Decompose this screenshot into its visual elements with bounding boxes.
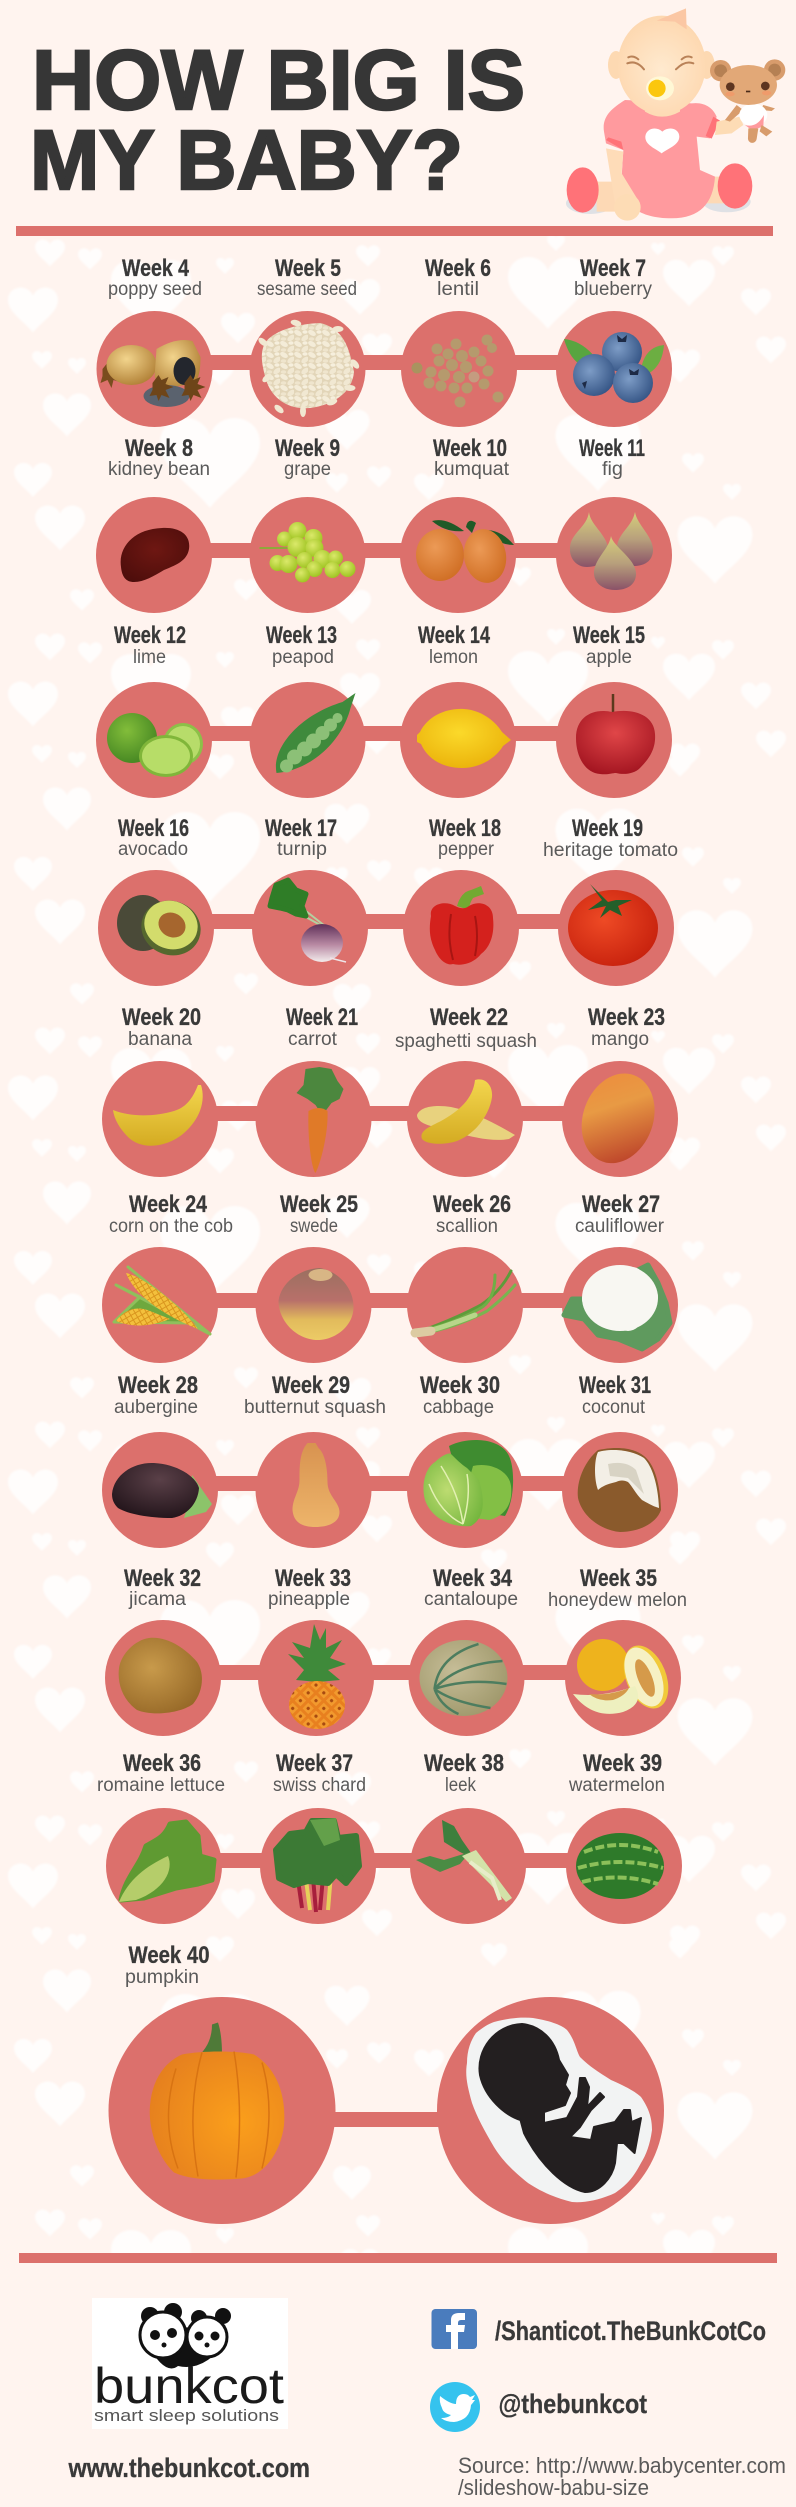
logo: bunkcot: bunkcot <box>94 2358 284 2414</box>
row: weeks 16 to 19 <box>98 815 678 986</box>
week 33: pineapple: pineapple <box>268 1589 350 1610</box>
week 12: lime <box>96 622 212 798</box>
title <box>30 33 525 207</box>
week 22: spaghetti squash <box>395 1004 537 1177</box>
connector <box>156 914 616 929</box>
week 37: swiss chard <box>260 1750 376 1924</box>
week 14: lemon: Week 14 <box>418 622 490 649</box>
connector <box>164 1853 624 1868</box>
week 17: turnip: Week 17 <box>265 815 337 842</box>
week 6: lentil <box>401 255 517 427</box>
week 34: cantaloupe <box>408 1565 524 1736</box>
week 31: coconut: coconut <box>582 1397 646 1418</box>
week 40: pumpkin: Week 40 <box>128 1942 210 1969</box>
icon: aubergine <box>112 1463 212 1518</box>
icon: watermelon <box>576 1833 664 1899</box>
week 13: peapod <box>250 622 366 798</box>
icon: cantaloupe <box>420 1640 508 1716</box>
week 31: coconut: Week 31 <box>579 1372 651 1399</box>
week 15: apple <box>556 622 672 798</box>
week 38: leek <box>410 1750 526 1924</box>
row: week 40 and baby <box>108 1942 664 2224</box>
icon: lentils <box>412 334 504 408</box>
week 29: butternut squash: Week 29 <box>272 1372 350 1399</box>
icon: peapod <box>276 693 356 773</box>
week 19: heritage tomato <box>543 815 678 986</box>
week 6: lentil: Week 6 <box>425 255 491 282</box>
connector <box>154 726 614 741</box>
week 28: aubergine <box>102 1372 218 1548</box>
week 28: aubergine: Week 28 <box>118 1372 198 1399</box>
week 36: romaine lettuce: Week 36 <box>123 1750 201 1777</box>
icon: jicama <box>119 1638 202 1713</box>
week 39: watermelon: Week 39 <box>583 1750 662 1777</box>
icon: grapes <box>260 522 356 582</box>
week 37: swiss chard: swiss chard <box>273 1775 366 1796</box>
week 28: aubergine: aubergine <box>114 1397 198 1418</box>
week 27: cauliflower: Week 27 <box>582 1191 660 1218</box>
title: HOW BIG IS <box>32 33 525 127</box>
icon: lemon <box>417 709 511 768</box>
icon: avocado <box>117 892 208 964</box>
week 14: lemon <box>400 622 516 798</box>
week 35: honeydew melon: Week 35 <box>580 1565 657 1592</box>
week 30: cabbage: Week 30 <box>420 1372 500 1399</box>
week 39: watermelon <box>566 1750 682 1924</box>
top divider <box>16 226 773 236</box>
icon: romaine lettuce <box>119 1822 214 1902</box>
connector <box>154 355 614 370</box>
week 22: spaghetti squash: Week 22 <box>430 1004 508 1031</box>
week 20: banana: Week 20 <box>122 1004 201 1031</box>
week 10: kumquat: Week 10 <box>433 435 507 462</box>
week 22: spaghetti squash: spaghetti squash <box>395 1031 537 1052</box>
week 8: kidney bean: kidney bean <box>108 459 210 480</box>
icon: pandas <box>140 2303 231 2368</box>
week 38: leek: Week 38 <box>424 1750 504 1777</box>
week 24: corn on the cob: Week 24 <box>129 1191 208 1218</box>
week 12: lime: lime <box>133 647 166 668</box>
week 40: pumpkin <box>108 1942 336 2224</box>
week 25: swede: swede <box>290 1216 338 1237</box>
icon: tomato <box>568 884 658 966</box>
row: weeks 20 to 23 <box>102 1004 678 1177</box>
week 23: mango: Week 23 <box>588 1004 665 1031</box>
week 11: fig: fig <box>602 459 623 480</box>
week 21: carrot <box>256 1004 372 1177</box>
week 33: pineapple <box>258 1565 374 1736</box>
week 34: cantaloupe: Week 34 <box>433 1565 513 1592</box>
icon: coconut <box>578 1448 661 1532</box>
week 5: sesame seed: Week 5 <box>275 255 341 282</box>
background heart pattern <box>8 236 786 2253</box>
row: weeks 36 to 39 <box>97 1750 682 1924</box>
source: /slideshow-babu-size <box>458 2475 649 2500</box>
week 32: jicama <box>105 1565 221 1736</box>
icon: mango <box>569 1063 667 1174</box>
week 18: pepper <box>403 815 519 986</box>
icon: facebook <box>432 2309 477 2349</box>
week 12: lime: Week 12 <box>114 622 186 649</box>
week 7: blueberry <box>556 255 672 427</box>
week 9: grape: Week 9 <box>275 435 340 462</box>
icon: figs <box>570 512 653 590</box>
bottom divider <box>19 2253 777 2263</box>
week 20: banana: banana <box>128 1029 192 1050</box>
week 6: lentil: lentil <box>437 279 479 300</box>
icon: turnip <box>270 880 346 962</box>
connector <box>160 1293 620 1308</box>
icon: honeydew melon <box>573 1639 677 1715</box>
icon: twitter <box>430 2382 480 2432</box>
row: weeks 32 to 35 <box>105 1565 687 1736</box>
icon: squash <box>417 1079 515 1144</box>
week 4: poppy seed: poppy seed <box>108 279 202 300</box>
icon: kidney bean <box>121 528 189 582</box>
week 7: blueberry: Week 7 <box>580 255 646 282</box>
week 25: swede <box>256 1191 372 1363</box>
icon: apple <box>576 694 655 774</box>
week 37: swiss chard: Week 37 <box>276 1750 353 1777</box>
womb shape <box>466 2018 652 2202</box>
baby in womb circle <box>437 1997 664 2224</box>
icon: sesame seeds <box>257 319 361 417</box>
week 10: kumquat <box>400 435 516 613</box>
icon: carrot <box>296 1067 344 1173</box>
source: Source: http://www.babycenter.com <box>458 2453 786 2478</box>
week 8: kidney bean <box>96 435 212 613</box>
logo: bunkcot: smart sleep solutions <box>94 2406 279 2425</box>
week 29: butternut squash: butternut squash <box>244 1397 386 1418</box>
icon: blueberries <box>564 332 664 403</box>
week 31: coconut <box>562 1372 678 1548</box>
illustration: baby with teddy bear <box>566 8 785 221</box>
row: weeks 28 to 31 <box>102 1372 678 1548</box>
icon: cauliflower <box>564 1265 670 1349</box>
icon: banana <box>113 1085 203 1146</box>
week 21: carrot: Week 21 <box>286 1004 358 1031</box>
row: weeks 4 to 7 <box>96 255 672 427</box>
week 11: fig <box>556 435 672 613</box>
icon: lime <box>107 713 203 777</box>
week 4: poppy seed: Week 4 <box>122 255 190 282</box>
week 16: avocado: Week 16 <box>118 815 189 842</box>
week 27: cauliflower <box>562 1191 678 1363</box>
week 35: honeydew melon <box>548 1565 687 1736</box>
week 26: scallion: scallion <box>436 1216 498 1237</box>
week 29: butternut squash <box>244 1372 386 1548</box>
week 26: scallion: Week 26 <box>433 1191 511 1218</box>
icon: corn <box>114 1267 210 1334</box>
icon: pineapple <box>288 1624 346 1729</box>
icon: swiss chard <box>276 1818 359 1912</box>
twitter link: @thebunkcot <box>498 2389 647 2419</box>
week 25: swede: Week 25 <box>280 1191 358 1218</box>
icon: swede <box>278 1268 354 1340</box>
week 5: sesame seed: sesame seed <box>257 279 357 300</box>
facebook link <box>432 2309 766 2349</box>
week 30: cabbage <box>407 1372 523 1548</box>
week 9: grape <box>250 435 366 613</box>
week 34: cantaloupe: cantaloupe <box>424 1589 518 1610</box>
week 20: banana <box>102 1004 218 1177</box>
icon: butternut squash <box>292 1443 340 1527</box>
week 32: jicama: Week 32 <box>124 1565 201 1592</box>
week 13: peapod: Week 13 <box>266 622 337 649</box>
week 19: heritage tomato: heritage tomato <box>543 840 678 861</box>
week 18: pepper: pepper <box>438 839 495 860</box>
week 33: pineapple: Week 33 <box>275 1565 351 1592</box>
week 9: grape: grape <box>284 459 331 480</box>
connector <box>154 543 614 558</box>
baby silhouette <box>479 2024 641 2192</box>
week 24: corn on the cob: corn on the cob <box>109 1216 233 1237</box>
week 16: avocado <box>98 815 214 986</box>
week 23: mango: mango <box>591 1029 649 1050</box>
week 17: turnip <box>252 815 368 986</box>
row: weeks 12 to 15 <box>96 622 672 798</box>
icon: cabbage <box>423 1440 513 1526</box>
week 13: peapod: peapod <box>272 647 334 668</box>
week 19: heritage tomato: Week 19 <box>572 815 643 842</box>
week 36: romaine lettuce <box>97 1750 225 1924</box>
week 11: fig: Week 11 <box>579 435 645 462</box>
website: www.thebunkcot.com <box>68 2453 310 2483</box>
week 32: jicama: jicama <box>128 1589 186 1610</box>
logo: bunkcot <box>92 2298 288 2429</box>
week 24: corn on the cob <box>102 1191 233 1363</box>
connector <box>163 1665 623 1680</box>
week 8: kidney bean: Week 8 <box>125 435 193 462</box>
week 17: turnip: turnip <box>277 839 327 860</box>
week 5: sesame seed <box>250 255 366 427</box>
week 30: cabbage: cabbage <box>423 1397 494 1418</box>
connector <box>160 1476 620 1491</box>
week 21: carrot: carrot <box>288 1029 338 1050</box>
connector <box>320 2112 450 2127</box>
week 15: apple: apple <box>586 647 632 668</box>
week 26: scallion <box>407 1191 523 1363</box>
icon: bell pepper <box>430 886 493 965</box>
week 27: cauliflower: cauliflower <box>575 1216 665 1237</box>
week 23: mango <box>562 1004 678 1177</box>
week 10: kumquat: kumquat <box>434 459 510 480</box>
week 38: leek: leek <box>445 1775 476 1796</box>
week 18: pepper: Week 18 <box>429 815 501 842</box>
week 15: apple: Week 15 <box>573 622 645 649</box>
connector <box>160 1106 620 1121</box>
source <box>458 2453 786 2500</box>
twitter link <box>430 2382 647 2432</box>
icon: pumpkin <box>150 2022 284 2180</box>
week 16: avocado: avocado <box>118 839 188 860</box>
week 39: watermelon: watermelon <box>568 1775 665 1796</box>
icon: scallion <box>415 1271 515 1333</box>
icon: kumquats <box>416 520 514 586</box>
title: MY BABY? <box>30 113 463 207</box>
row: weeks 24 to 27 <box>102 1191 678 1363</box>
week 14: lemon: lemon <box>429 647 478 668</box>
icon: leek <box>416 1820 512 1902</box>
week 36: romaine lettuce: romaine lettuce <box>97 1775 225 1796</box>
week 7: blueberry: blueberry <box>574 279 652 300</box>
icon: poppy seed <box>100 340 206 407</box>
week 4: poppy seed <box>96 255 212 427</box>
week 35: honeydew melon: honeydew melon <box>548 1590 687 1611</box>
row: weeks 8 to 11 <box>96 435 672 613</box>
week 40: pumpkin: pumpkin <box>125 1967 199 1988</box>
